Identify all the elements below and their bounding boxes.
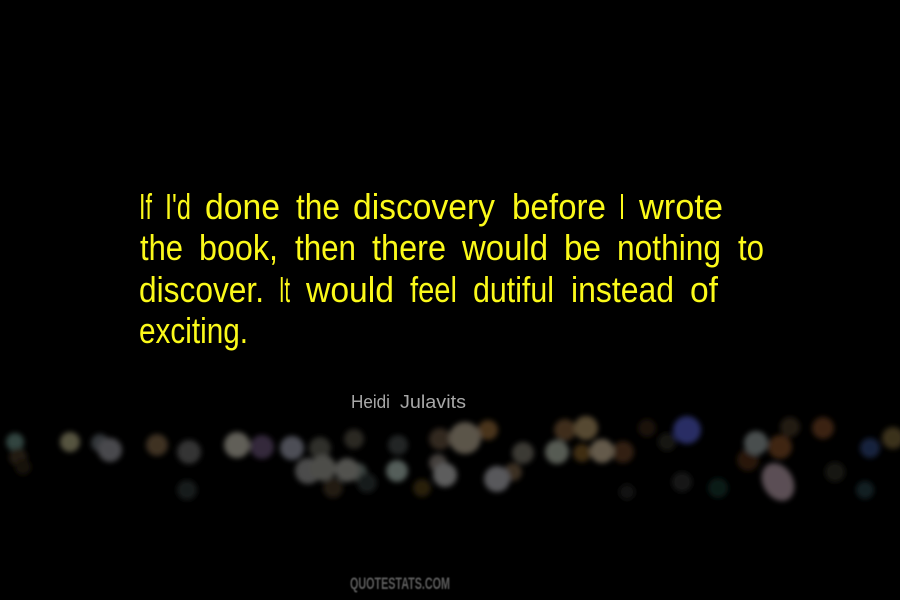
quote text: done	[205, 186, 280, 227]
quote text: discover.	[139, 269, 264, 310]
quote text: If	[139, 186, 153, 227]
author: Heidi	[351, 392, 390, 412]
quote text: dutiful	[473, 269, 554, 310]
quote text: book,	[199, 227, 278, 268]
quote text: before	[512, 186, 606, 227]
quote text: It	[279, 269, 290, 310]
quote text: I	[619, 186, 625, 227]
quote text: wrote	[638, 186, 723, 227]
quote text	[139, 186, 764, 351]
quote text: nothing	[617, 227, 721, 268]
author	[351, 392, 466, 412]
quote text: instead	[571, 269, 674, 310]
quote text: of	[690, 269, 719, 310]
quote text: I'd	[165, 186, 191, 227]
quote text: the	[296, 186, 340, 227]
quote text: there	[372, 227, 446, 268]
quote text: would	[305, 269, 394, 310]
quote text: the	[140, 227, 183, 268]
quote text: discovery	[353, 186, 495, 227]
quote text: exciting.	[139, 310, 248, 351]
quote text: feel	[410, 269, 457, 310]
blurred city lights	[6, 416, 900, 507]
author: Julavits	[400, 392, 466, 412]
quote text: then	[295, 227, 356, 268]
quote text: would	[461, 227, 548, 268]
site footer: QUOTESTATS.COM	[350, 575, 450, 593]
quote text: to	[738, 227, 764, 268]
quote text: be	[564, 227, 601, 268]
